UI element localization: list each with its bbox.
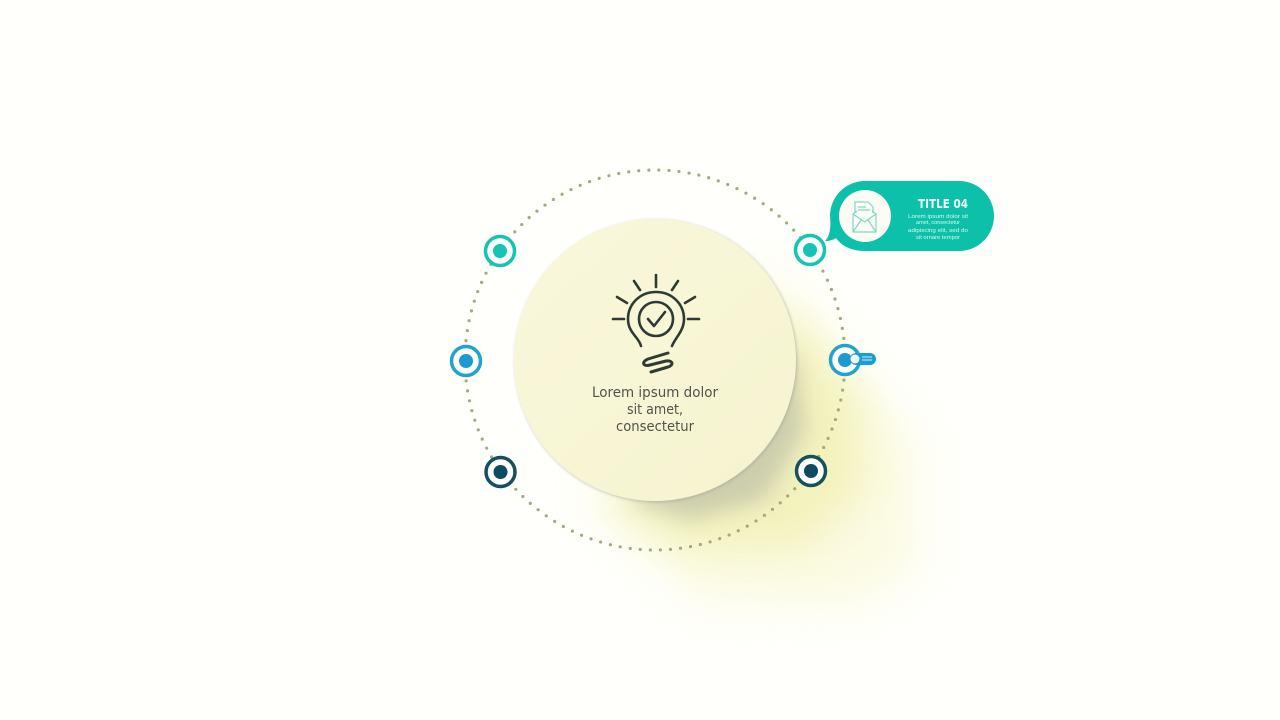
- callout body text: Lorem ipsum dolor sit: [908, 214, 969, 220]
- icon: light bulb with check mark: [613, 275, 699, 372]
- central disc: consectetur: [616, 419, 694, 435]
- central disc: sit amet,: [627, 402, 683, 418]
- node: blue left: [452, 346, 480, 376]
- node: navy lower left: [486, 458, 515, 486]
- small callout pill: [850, 353, 876, 365]
- node: navy lower right: [796, 456, 826, 486]
- node: teal upper left: [486, 236, 514, 266]
- node: teal upper right: [796, 236, 824, 264]
- callout body text: adipiscing elit, sed do: [908, 228, 968, 234]
- central caption: Lorem ipsum dolor: [592, 385, 718, 401]
- callout body text: amet, consectetur: [916, 220, 960, 226]
- long shadow of the central disc: [590, 270, 915, 605]
- node: blue right with small callout: [830, 346, 876, 374]
- central disc: [514, 219, 797, 502]
- callout title: TITLE 04: [918, 197, 968, 211]
- callout body text: sit ornare tempor: [916, 235, 960, 241]
- callout: title 04: [825, 181, 994, 251]
- callout body text: [908, 214, 969, 241]
- icon: envelope with document: [839, 190, 891, 242]
- dotted orbit ring: [465, 170, 845, 550]
